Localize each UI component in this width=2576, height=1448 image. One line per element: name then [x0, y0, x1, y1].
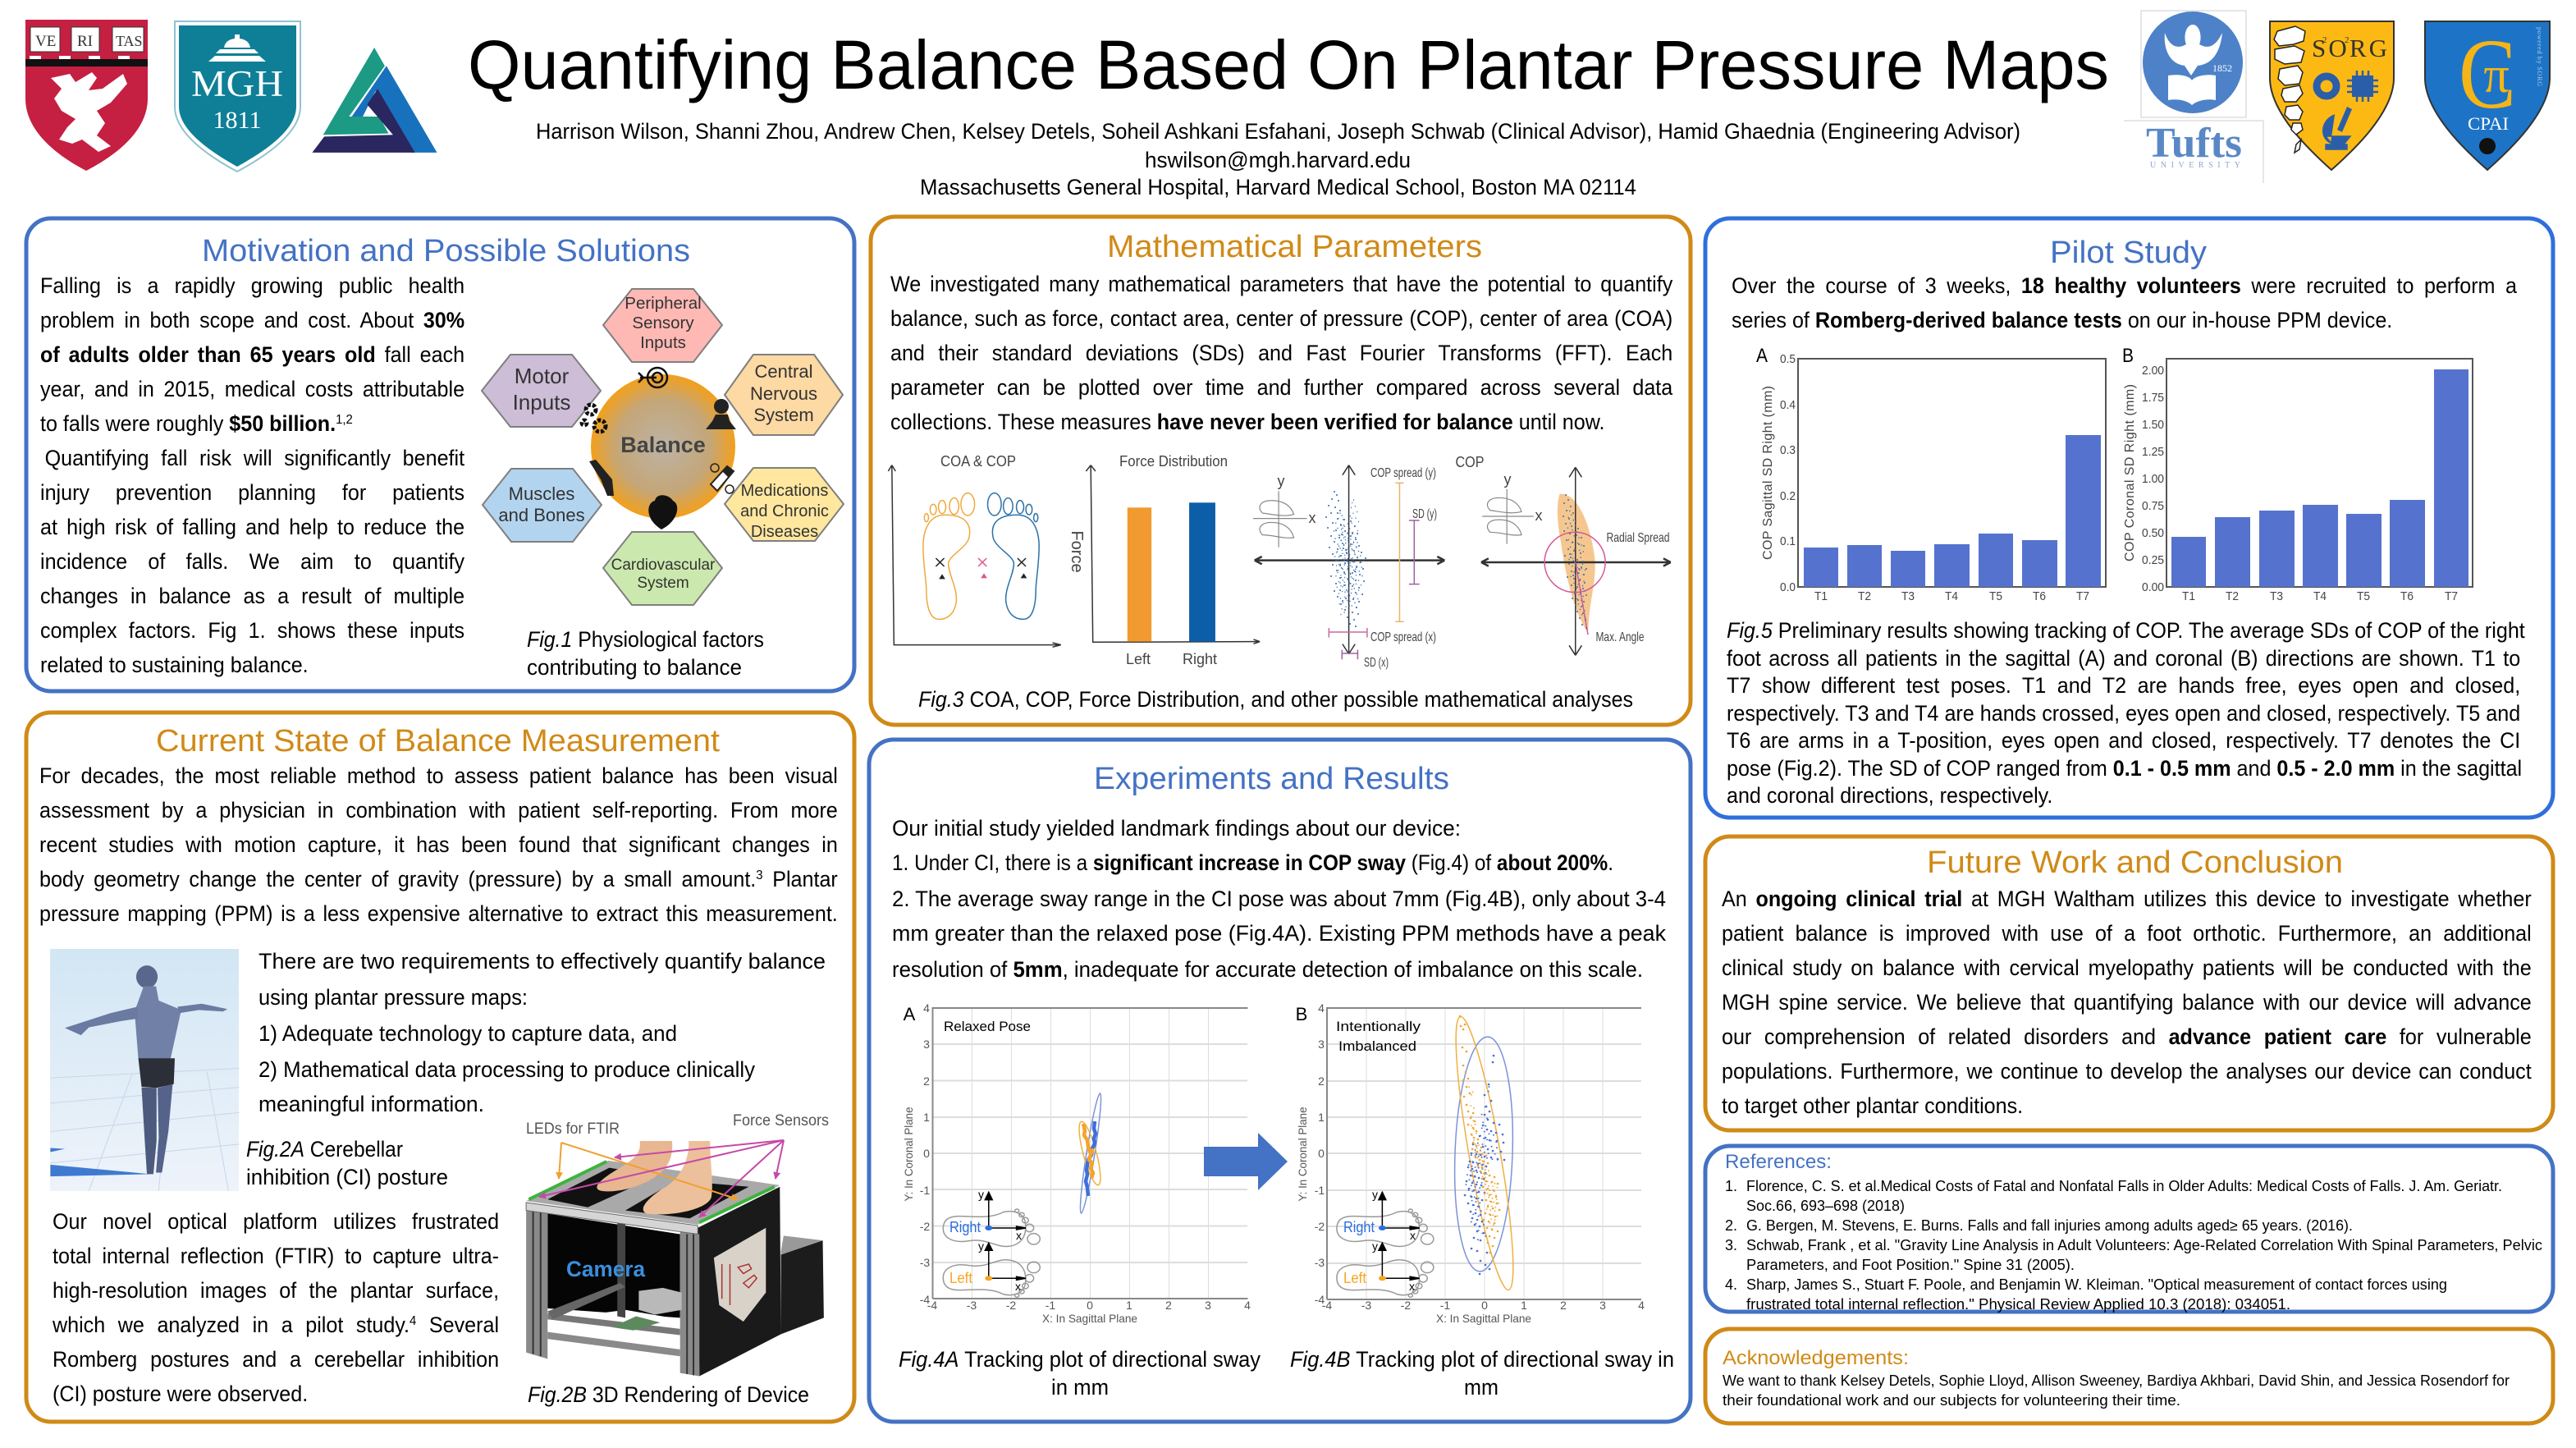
fig 3 labels: COP — [1456, 454, 1484, 470]
text block: two requirements: 1) Adequate technology to capture data, and — [259, 1021, 677, 1046]
text block: mathematical parameters body: balance, such as force, contact area, center of pressure (COP), center of area (COA) — [890, 306, 1672, 331]
chart: figure 5B coronal SD: 1.00 — [2142, 472, 2164, 486]
logo: CPAI shield: powered by SORG — [2536, 27, 2543, 86]
logo: CPAI shield: CPAI — [2468, 113, 2509, 134]
text block: reference list — [1725, 1178, 2542, 1313]
text block: current state intro — [39, 758, 838, 931]
chart: figure 5B coronal SD: 1.50 — [2142, 418, 2164, 432]
chart: figure 5A sagittal SD: T1 — [1814, 589, 1828, 603]
caption: figure 1: contributing to balance — [527, 655, 742, 680]
logo: MGH shield: 1811 — [213, 107, 261, 134]
chart: COP spread axes — [1253, 465, 1444, 659]
title: Quantifying Balance Based On Plantar Pressure Maps — [468, 26, 2109, 103]
chart: figure 4B intentionally imbalanced: -4 — [1322, 1299, 1332, 1312]
logo: SORG shield: SORG — [2312, 34, 2387, 62]
chart: figure 4B intentionally imbalanced: x — [1409, 1280, 1415, 1293]
chart: figure 4A relaxed pose: 3 — [1205, 1299, 1211, 1312]
logo: Tufts seal and wordmark: UNIVERSITY — [2150, 161, 2240, 170]
fig 3 labels: x — [1308, 510, 1316, 526]
text block: two requirements: using plantar pressure maps: — [259, 985, 528, 1010]
chart: figure 4B intentionally imbalanced: Right — [1343, 1219, 1375, 1235]
caption: figure 2B: Fig.2B 3D Rendering of Device — [528, 1382, 809, 1407]
panel: experiments and results — [869, 740, 1691, 1422]
label: force sensors: Force Sensors — [733, 1112, 829, 1130]
hexagon: medications and chronic diseases: Diseases — [751, 523, 818, 541]
chart: figure 5B coronal SD: 0.25 — [2142, 553, 2164, 567]
caption: figure 5: and coronal directions, respectively. — [1727, 783, 2052, 808]
text block: future work body: to target other plantar conditions. — [1722, 1093, 2023, 1118]
fig 3 labels: Right — [1183, 651, 1217, 667]
text block: two requirements — [259, 949, 826, 1116]
chart: figure 4A relaxed pose: -4 — [927, 1299, 937, 1312]
text block: reference list: Soc.66, 693–698 (2018) — [1746, 1198, 1905, 1214]
email: hswilson@mgh.harvard.edu — [1145, 148, 1411, 172]
chart: figure 4B intentionally imbalanced: y — [1372, 1240, 1378, 1253]
chart: figure 4A relaxed pose: -1 — [1045, 1299, 1055, 1312]
icon: target — [638, 368, 667, 387]
logo: SORG shield — [2270, 21, 2394, 170]
chart: figure 4B intentionally imbalanced: -3 — [1361, 1299, 1371, 1312]
text block: acknowledgements: their foundational work and our subjects for volunteering their time. — [1723, 1392, 2180, 1409]
chart: figure 4B intentionally imbalanced: X: In Sagittal Plane — [1436, 1312, 1531, 1325]
logo: Tufts seal and wordmark: Tufts — [2146, 120, 2242, 167]
hexagon: medications and chronic diseases: and Chronic — [740, 502, 829, 520]
logo: MGH shield — [175, 21, 300, 172]
heading: motivation: Motivation and Possible Solutions — [202, 234, 690, 268]
chart: figure 5A sagittal SD: T3 — [1901, 589, 1915, 603]
chart: figure 4A relaxed pose: -4 — [920, 1293, 930, 1306]
text block: mathematical parameters body: parameter can be plotted over time and further compared across several data — [890, 375, 1672, 400]
text block: two requirements: 2) Mathematical data processing to produce clinically — [259, 1057, 755, 1082]
fig 3 labels: x — [1535, 507, 1543, 524]
chart: figure 4B intentionally imbalanced: B — [1296, 1004, 1307, 1024]
text block: future work body: populations. Furthermore, we continue to develop the analyses our device can conduct — [1722, 1059, 2532, 1084]
chart: figure 4A relaxed pose: X: In Sagittal Plane — [1042, 1312, 1137, 1325]
text block: future work body: our comprehension of related disorders and advance patient care for vulnerable — [1722, 1024, 2532, 1049]
image: 3D rendering of device — [526, 1112, 829, 1377]
hexagon: cardiovascular system: System — [637, 575, 689, 592]
fig 3 labels: Max. Angle — [1595, 630, 1645, 644]
chart: figure 4B intentionally imbalanced: Imbalanced — [1338, 1038, 1416, 1054]
chart: figure 4A relaxed pose: 3 — [923, 1038, 930, 1051]
text block: motivation body: changes in balance as a result of multiple — [40, 584, 464, 608]
caption: figure 4B — [1290, 1347, 1674, 1400]
text block: two requirements: meaningful information. — [259, 1092, 484, 1116]
text block: mathematical parameters body — [890, 267, 1672, 439]
chart: figure 4A relaxed pose: 0 — [1087, 1299, 1093, 1312]
text block: optical platform: total internal reflection (FTIR) to capture ultra- — [53, 1244, 499, 1268]
icon: heart — [648, 495, 677, 529]
panel: current state of balance measurement — [26, 713, 854, 1422]
logo: MGH shield: MGH — [191, 63, 283, 104]
caption: figure 1: Fig.1 Physiological factors — [527, 627, 764, 652]
chart: figure 5A sagittal SD: 0.0 — [1780, 580, 1796, 594]
COP scatter — [1326, 492, 1366, 626]
hexagon: muscles and bones — [483, 469, 602, 542]
hexagon: central nervous system: System — [753, 405, 814, 425]
text block: reference list: Sharp, James S., Stuart F. Poole, and Benjamin W. Kleiman. "Optical measurement of contact forces using — [1746, 1276, 2447, 1293]
text block: mathematical parameters body: We investigated many mathematical parameters that have the potential to quantify — [890, 272, 1672, 296]
text block: reference list: 4. — [1725, 1276, 1737, 1293]
chart: figure 4B intentionally imbalanced: 2 — [1318, 1075, 1325, 1088]
logo: SORG shield: 2 — [2322, 35, 2327, 45]
text block: optical platform: Romberg postures and a cerebellar inhibition — [53, 1347, 499, 1372]
panel: future work and conclusion — [1705, 836, 2553, 1130]
chart: figure 4B intentionally imbalanced: 4 — [1318, 1001, 1325, 1015]
heading: future work: Future Work and Conclusion — [1927, 845, 2343, 880]
logo: SORG shield: 2 — [2345, 35, 2349, 45]
diagram: physiological factors — [482, 289, 844, 605]
text block: future work body: patient balance is improved with use of a foot orthotic. Furthermore, an additional — [1722, 921, 2532, 946]
text block: findings: 2. The average sway range in the CI pose was about 7mm (Fig.4B), only about 3-4 — [892, 887, 1666, 911]
text block: motivation body: at high risk of falling and help to reduce the — [40, 515, 464, 539]
chart: figure 4B intentionally imbalanced: -3 — [1315, 1256, 1325, 1269]
text block: reference list: Florence, C. S. et al.Medical Costs of Fatal and Nonfatal Falls in Older Adults: Medical Costs of Falls. J. Am. Geriatr. — [1746, 1178, 2502, 1194]
chart: figure 5B coronal SD: 0.75 — [2142, 499, 2164, 513]
text block: motivation body — [40, 268, 464, 682]
hexagon: central nervous system — [725, 355, 843, 435]
text block: future work body: clinical study on balance with cervical myelopathy patients will be conducted with the — [1722, 955, 2532, 980]
caption: figure 5: T6 are arms in a T-position, eyes open and closed, respectively. T7 denotes the CI — [1727, 728, 2520, 753]
arrows: LEDs — [559, 1143, 738, 1199]
caption: figure 2A: inhibition (CI) posture — [246, 1165, 448, 1189]
hexagon: peripheral sensory inputs — [603, 289, 722, 362]
caption: figure 4A: Fig.4A Tracking plot of directional sway — [899, 1347, 1261, 1372]
chart: figure 4B intentionally imbalanced: Left — [1343, 1270, 1366, 1286]
chart: figure 5B coronal SD: T2 — [2226, 589, 2239, 603]
chart: figure 4A relaxed pose: -2 — [1006, 1299, 1016, 1312]
chart: figure 4A relaxed pose: Relaxed Pose — [944, 1019, 1031, 1034]
chart: figure 4B intentionally imbalanced: 0 — [1318, 1147, 1325, 1160]
caption: figure 4A — [899, 1347, 1261, 1400]
panel: acknowledgements — [1705, 1329, 2553, 1423]
chart: figure 4A relaxed pose: Y: In Coronal Plane — [902, 1107, 915, 1202]
text block: two requirements: There are two requirements to effectively quantify balance — [259, 949, 826, 974]
chart: figure 5A sagittal SD — [1756, 345, 2106, 603]
hexagon: peripheral sensory inputs: Sensory — [632, 314, 694, 332]
caption: figure 4A: in mm — [1051, 1375, 1109, 1400]
text block: pilot study intro: series of Romberg-derived balance tests on our in-house PPM device. — [1732, 308, 2392, 332]
chart: figure 4A relaxed pose: 1 — [923, 1111, 930, 1124]
chart: figure 4B intentionally imbalanced: 1 — [1521, 1299, 1527, 1312]
text block: reference list: 1. — [1725, 1178, 1737, 1194]
chart: figure 4A relaxed pose: -3 — [967, 1299, 977, 1312]
caption: figure 5: foot across all patients in the sagittal (A) and coronal (B) directions are shown. T1 to — [1727, 645, 2520, 670]
caption: figure 4B: Fig.4B Tracking plot of directional sway in — [1290, 1347, 1674, 1372]
caption: figure 3: Fig.3 COA, COP, Force Distribution, and other possible mathematical analyses — [918, 687, 1633, 712]
caption: figure 1 — [527, 627, 764, 680]
chart: figure 5A sagittal SD: T7 — [2076, 589, 2089, 603]
logo: CPAI shield — [2425, 19, 2550, 170]
chart: figure 4B intentionally imbalanced: -2 — [1401, 1299, 1411, 1312]
chart: figure 5A sagittal SD: T2 — [1858, 589, 1871, 603]
chart: figure 4A relaxed pose: Right — [949, 1219, 981, 1235]
logo: Tufts seal and wordmark: 1852 — [2212, 62, 2232, 74]
chart: figure 4B intentionally imbalanced: y — [1372, 1188, 1378, 1201]
label: camera: Camera — [566, 1257, 646, 1281]
text block: optical platform: Our novel optical platform utilizes frustrated — [53, 1209, 499, 1234]
text block: motivation body: complex factors. Fig 1. shows these inputs — [40, 618, 464, 643]
caption: figure 4B: mm — [1464, 1375, 1498, 1400]
chart: figure 5A sagittal SD: 0.2 — [1780, 489, 1796, 503]
chart: figure 4A relaxed pose: y — [978, 1188, 984, 1201]
text block: mathematical parameters body: collections. These measures have never been verified for balance until now. — [890, 410, 1604, 434]
text block: optical platform: high-resolution images of the plantar surface, — [53, 1278, 499, 1303]
chart: figure 4A relaxed pose — [902, 1001, 1251, 1325]
chart: figure 4A relaxed pose: 0 — [923, 1147, 930, 1160]
logo: triangle — [312, 48, 437, 153]
icon: gears — [582, 405, 606, 432]
chart: figure 4A relaxed pose: -1 — [920, 1184, 930, 1197]
chart: figure 5B coronal SD: 2.00 — [2142, 364, 2164, 378]
chart: radial spread — [1481, 467, 1671, 655]
authors: Harrison Wilson, Shanni Zhou, Andrew Chen, Kelsey Detels, Soheil Ashkani Esfahani, Joseph Schwab (Clinical Advisor), Hamid Ghaednia (Engineering Advisor) — [536, 119, 2020, 144]
chart: figure 4B intentionally imbalanced: 3 — [1318, 1038, 1325, 1051]
hexagon: peripheral sensory inputs: Peripheral — [625, 294, 702, 313]
chart: figure 5A sagittal SD: T6 — [2033, 589, 2046, 603]
chart: figure 4A relaxed pose: x — [1016, 1229, 1022, 1242]
panel: mathematical parameters — [871, 217, 1691, 725]
fig 3 labels: SD (x) — [1364, 656, 1389, 670]
panel: references — [1705, 1146, 2553, 1313]
hexagon: cardiovascular system — [603, 532, 722, 605]
fig 3 labels: Radial Spread — [1607, 531, 1669, 545]
chart: figure 5A sagittal SD: COP Sagittal SD Right (mm) — [1761, 386, 1775, 560]
text block: optical platform: (CI) posture were observed. — [53, 1382, 308, 1406]
chart: figure 5B coronal SD — [2122, 345, 2473, 603]
label: LEDs for FTIR: LEDs for FTIR — [526, 1120, 620, 1138]
chart: figure 4B intentionally imbalanced: -1 — [1440, 1299, 1450, 1312]
text block: acknowledgements — [1723, 1372, 2510, 1409]
text block: future work body: An ongoing clinical trial at MGH Waltham utilizes this device to investigate whether — [1722, 887, 2532, 911]
image: cerebellar inhibition posture — [50, 949, 239, 1191]
chart: force distribution bars — [1128, 502, 1215, 642]
hexagon: cardiovascular system: Cardiovascular — [611, 557, 716, 574]
heading: references: References: — [1725, 1151, 1832, 1173]
text block: current state intro: pressure mapping (PPM) is a less expensive alternative to extract this measurement. — [39, 901, 838, 926]
chart: figure 5B coronal SD: COP Coronal SD Right (mm) — [2123, 384, 2137, 561]
chart: figure 4B intentionally imbalanced: Y: In Coronal Plane — [1296, 1107, 1309, 1202]
arrow: relaxed to imbalanced — [1204, 1133, 1288, 1190]
text block: motivation body: of adults older than 65 years old fall each — [40, 342, 464, 367]
chart: figure 5B coronal SD: T1 — [2182, 589, 2195, 603]
caption: figure 2A: Fig.2A Cerebellar — [246, 1137, 403, 1162]
text block: motivation body: injury prevention planning for patients — [40, 480, 464, 505]
fig 3 labels: y — [1503, 471, 1512, 488]
caption: figure 5: Fig.5 Preliminary results showing tracking of COP. The average SDs of COP of the right — [1727, 618, 2525, 643]
balance circle: Balance — [620, 433, 706, 457]
radial scatter — [1563, 495, 1586, 628]
chart: figure 4B intentionally imbalanced: -4 — [1315, 1293, 1325, 1306]
heading: experiments: Experiments and Results — [1094, 762, 1449, 796]
chart: figure 5B coronal SD: T7 — [2445, 589, 2458, 603]
chart: figure 4A relaxed pose: A — [904, 1004, 916, 1024]
chart: figure 5A sagittal SD: T5 — [1989, 589, 2002, 603]
chart: figure 5A sagittal SD: 0.5 — [1780, 352, 1796, 366]
text block: reference list: Parameters, and Foot Position." Spine 31 (2005). — [1746, 1257, 2075, 1273]
fig 3 labels: SD (y) — [1412, 507, 1437, 521]
caption: figure 5: T7 show different test poses. T1 and T2 are hands free, eyes open and closed, — [1727, 673, 2520, 698]
text block: future work body — [1722, 882, 2532, 1125]
text block: findings — [892, 816, 1666, 982]
caption: figure 5: pose (Fig.2). The SD of COP ranged from 0.1 - 0.5 mm and 0.5 - 2.0 mm in the sagittal — [1727, 755, 2522, 780]
chart: figure 5A sagittal SD: 0.3 — [1780, 443, 1796, 457]
chart: figure 5B coronal SD: T3 — [2270, 589, 2283, 603]
chart: figure 4B intentionally imbalanced: 1 — [1318, 1111, 1325, 1124]
chart: figure 4B intentionally imbalanced: Intentionally — [1336, 1019, 1421, 1034]
fig 3 labels: Force Distribution — [1119, 453, 1228, 470]
chart: figure 4A relaxed pose: -3 — [920, 1256, 930, 1269]
logo: CPAI shield: C — [2459, 19, 2516, 130]
text block: reference list: 3. — [1725, 1237, 1737, 1253]
chart: figure 4B intentionally imbalanced: 4 — [1638, 1299, 1645, 1312]
fig 3 labels: Left — [1126, 651, 1151, 667]
chart: figure 5A sagittal SD: 0.1 — [1780, 534, 1796, 548]
chart: figure 4B intentionally imbalanced: x — [1410, 1229, 1416, 1242]
fig 3 labels: Force — [1068, 530, 1086, 573]
chart: figure 4A relaxed pose: x — [1015, 1280, 1021, 1293]
chart: figure 4B intentionally imbalanced — [1296, 1001, 1645, 1325]
chart: figure 4B intentionally imbalanced: 3 — [1599, 1299, 1606, 1312]
hexagon: motor inputs — [482, 355, 601, 427]
text block: pilot study intro: Over the course of 3 weeks, 18 healthy volunteers were recruited to perform a — [1732, 273, 2517, 298]
logo: Harvard shield: VE — [35, 33, 56, 50]
text block: pilot study intro — [1732, 268, 2517, 337]
text block: reference list: 2. — [1725, 1217, 1737, 1234]
text block: findings: mm greater than the relaxed pose (Fig.4A). Existing PPM methods have a peak — [892, 921, 1666, 946]
chart: figure 4A relaxed pose: y — [978, 1240, 984, 1253]
chart: figure 5A sagittal SD: 0.4 — [1780, 398, 1796, 412]
hexagon: medications and chronic diseases — [725, 468, 844, 541]
hexagon: motor inputs: Inputs — [513, 390, 570, 415]
caption: figure 5 — [1727, 617, 2520, 811]
hexagon: peripheral sensory inputs: Inputs — [640, 333, 686, 352]
chart: figure 5A sagittal SD: T4 — [1945, 589, 1958, 603]
text block: motivation body: year, and in 2015, medical costs attributable — [40, 377, 464, 401]
text block: reference list: G. Bergen, M. Stevens, E. Burns. Falls and fall injuries among adults aged≥ 65 years. (2016). — [1746, 1217, 2353, 1234]
chart: figure 5B coronal SD: T4 — [2313, 589, 2327, 603]
fig 3 labels: COA & COP — [940, 453, 1016, 470]
logo: Harvard shield: RI — [77, 33, 93, 50]
text block: mathematical parameters body: and their standard deviations (SDs) and Fast Fourier Transforms (FFT). Each — [890, 341, 1672, 365]
icon: pill — [711, 464, 734, 493]
text block: motivation body: problem in both scope and cost. About 30% — [40, 308, 464, 332]
text block: current state intro: assessment by a physician in combination with patient self-reporting. From more — [39, 798, 838, 823]
text block: motivation body: Falling is a rapidly growing public health — [40, 273, 464, 298]
heading: pilot study: Pilot Study — [2050, 236, 2207, 270]
chart: figure 4B intentionally imbalanced: -2 — [1315, 1220, 1325, 1233]
chart: figure 4A relaxed pose: 2 — [1165, 1299, 1172, 1312]
chart: figure 5B coronal SD: 0.00 — [2142, 580, 2164, 594]
logo: Harvard shield — [25, 20, 148, 171]
text block: motivation body: incidence of falls. We aim to quantify — [40, 549, 464, 574]
hexagon: medications and chronic diseases: Medications — [741, 482, 828, 500]
caption: figure 5: respectively. T3 and T4 are hands crossed, eyes open and closed, respectively. T5 and — [1727, 701, 2520, 726]
text block: findings: resolution of 5mm, inadequate for accurate detection of imbalance on this scale. — [892, 957, 1643, 982]
text block: future work body: MGH spine service. We believe that quantifying balance with our device will advance — [1722, 990, 2532, 1015]
chart: figure 4A relaxed pose: 2 — [923, 1075, 930, 1088]
icon: nervous system head — [706, 399, 736, 429]
fig 3 labels: COP spread (y) — [1370, 466, 1436, 480]
heading: current state: Current State of Balance Measurement — [156, 724, 720, 758]
fig 3 labels — [940, 453, 1669, 670]
text block: findings: 1. Under CI, there is a significant increase in COP sway (Fig.4) of about 200%. — [892, 850, 1613, 875]
text block: acknowledgements: We want to thank Kelsey Detels, Sophie Lloyd, Allison Sweeney, Bardiya Akhbari, David Shin, and Jessica Rosendorf for — [1723, 1372, 2510, 1389]
chart: figure 4A relaxed pose: 4 — [923, 1001, 930, 1015]
fig 3 labels: y — [1277, 473, 1285, 489]
panel: pilot study — [1705, 218, 2553, 818]
arrows: force sensors — [539, 1140, 784, 1217]
hexagon: muscles and bones: Muscles — [509, 483, 574, 504]
chart: figure 5B coronal SD: 1.25 — [2142, 445, 2164, 459]
chart: figure 4A relaxed pose: Left — [949, 1270, 972, 1286]
balance circle — [591, 374, 735, 519]
text block: current state intro: recent studies with motion capture, it has been found that significant changes in — [39, 832, 838, 857]
logo: Tufts seal and wordmark — [2124, 11, 2263, 183]
chart: figure 5B coronal SD: 1.75 — [2142, 391, 2164, 405]
chart: figure 5B coronal SD: T6 — [2400, 589, 2414, 603]
hexagon: muscles and bones: and Bones — [498, 505, 585, 525]
caption: figure 2A — [246, 1137, 448, 1189]
hexagon: motor inputs: Motor — [515, 364, 570, 388]
chart: figure 4A relaxed pose: 4 — [1244, 1299, 1251, 1312]
text block: current state intro: For decades, the most reliable method to assess patient balance has been visual — [39, 763, 838, 788]
text block: motivation body: to falls were roughly $50 billion.1,2 — [40, 411, 353, 436]
chart: figure 5B coronal SD: 0.50 — [2142, 526, 2164, 540]
heading: mathematical parameters: Mathematical Parameters — [1107, 230, 1482, 264]
figure 3: analyses — [888, 453, 1671, 670]
chart: figure 4B intentionally imbalanced: 0 — [1481, 1299, 1488, 1312]
text block: reference list: frustrated total internal reflection." Physical Review Applied 10.3 (2018): 034051. — [1746, 1296, 2290, 1313]
heading: acknowledgements: Acknowledgements: — [1723, 1347, 1909, 1369]
chart: figure 4A relaxed pose: -2 — [920, 1220, 930, 1233]
icon: muscle arm — [589, 460, 614, 496]
chart: COA and COP feet — [888, 465, 1260, 647]
chart: figure 5B coronal SD: B — [2122, 345, 2134, 367]
logo: CPAI shield: π — [2483, 48, 2510, 103]
hexagon: central nervous system: Nervous — [750, 383, 817, 404]
text block: reference list: Schwab, Frank , et al. "Gravity Line Analysis in Adult Volunteers: Age-Related Correlation With Spinal Parameters, Pelvic — [1746, 1237, 2542, 1253]
text block: findings: Our initial study yielded landmark findings about our device: — [892, 816, 1461, 841]
chart: figure 5B coronal SD: T5 — [2357, 589, 2370, 603]
panel: motivation and possible solutions — [26, 218, 854, 691]
text block: current state intro: body geometry change the center of gravity (pressure) by a small amount.3 Plantar — [39, 867, 838, 891]
affiliation: Massachusetts General Hospital, Harvard Medical School, Boston MA 02114 — [920, 175, 1636, 199]
fig 3 labels: COP spread (x) — [1370, 630, 1436, 644]
logo: Harvard shield: TAS — [116, 33, 143, 49]
text block: motivation body: related to sustaining balance. — [40, 653, 309, 677]
chart: figure 5A sagittal SD: A — [1756, 345, 1768, 367]
chart: figure 4B intentionally imbalanced: -1 — [1315, 1184, 1325, 1197]
chart: figure 4B intentionally imbalanced: 2 — [1560, 1299, 1567, 1312]
text block: motivation body: Quantifying fall risk will significantly benefit — [45, 446, 464, 470]
chart: figure 4A relaxed pose: 1 — [1126, 1299, 1132, 1312]
text block: optical platform: which we analyzed in a pilot study.4 Several — [53, 1313, 499, 1337]
hexagon: central nervous system: Central — [755, 361, 812, 382]
text block: optical platform — [53, 1204, 499, 1414]
